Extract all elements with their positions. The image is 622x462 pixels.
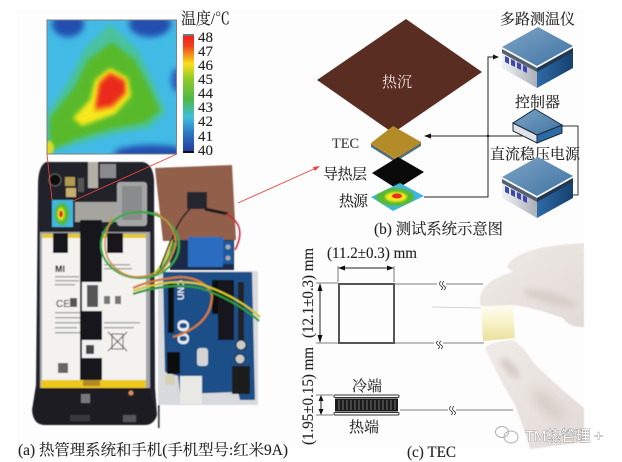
heat map colour scale: 44 <box>198 86 214 102</box>
width arrow <box>338 266 394 270</box>
Arduino board: oo <box>171 319 194 345</box>
flex cable <box>80 220 102 380</box>
TEC dimension drawing: (12.1±0.3) mm <box>300 247 317 338</box>
watermark <box>496 426 603 445</box>
schematic labels: TEC <box>332 136 359 152</box>
heat map colour scale: 40 <box>198 143 213 159</box>
icon: multi-channel thermometer <box>502 27 573 88</box>
schematic labels: 热源 <box>339 192 369 210</box>
Arduino board <box>158 271 258 428</box>
phone body: CE <box>56 299 70 310</box>
schematic labels: 导热层 <box>323 165 367 183</box>
schematic labels: 控制器 <box>515 94 560 111</box>
caption c: (c) TEC <box>407 444 456 461</box>
phone body <box>32 162 157 425</box>
coloured wires <box>101 212 260 337</box>
TEC dimension drawing: 热端 <box>349 418 379 436</box>
TEC dimension drawing <box>300 245 513 445</box>
heat map colour scale: 45 <box>198 72 213 88</box>
relay board <box>170 237 234 270</box>
mini heat map on phone <box>52 200 73 227</box>
colour scale title: 温度/℃ <box>181 10 230 28</box>
schematic labels: 直流稳压电源 <box>490 145 581 163</box>
gloved hand holding TEC <box>432 243 584 449</box>
schematic labels: 多路测温仪 <box>500 11 575 28</box>
TEC dimension drawing: (1.95±0.15) mm <box>300 346 317 445</box>
heat map colour scale: 48 <box>198 30 213 46</box>
connector: heat source to multi-channel thermometer <box>424 54 499 197</box>
TEC dimension drawing: (11.2±0.3) mm <box>327 245 418 262</box>
schematic: TEC module <box>371 126 421 162</box>
red arrow to schematic <box>238 166 320 203</box>
caption b: (b) 测试系统示意图 <box>374 220 503 238</box>
schematic: heat sink <box>317 19 482 133</box>
heat map colour scale: 46 <box>198 58 214 74</box>
red zoom lines <box>47 154 177 201</box>
heat map colour scale: 42 <box>198 114 213 130</box>
thickness arrow <box>318 395 324 415</box>
heat map colour scale: 41 <box>198 129 213 145</box>
top view square <box>339 284 394 343</box>
speaker housing <box>33 389 156 425</box>
TEC side view <box>334 395 399 415</box>
schematic: heat source <box>371 183 424 211</box>
phone and control hardware photo <box>32 162 260 428</box>
heat map <box>46 20 177 154</box>
schematic: heat sink: 热沉 <box>382 73 412 91</box>
battery <box>42 234 146 387</box>
connector: controller to TEC <box>424 134 523 138</box>
connector: controller to power supply <box>562 126 578 195</box>
schematic labels <box>323 11 581 210</box>
watermark: TM热管理 + <box>525 428 603 445</box>
icon: controller <box>513 109 562 143</box>
phone body: MI <box>55 264 65 274</box>
TEC dimension drawing: 冷端 <box>352 378 382 395</box>
copper heat sink plate <box>155 165 240 250</box>
heat map colour scale: 47 <box>198 44 214 60</box>
icon: DC power supply <box>502 157 573 218</box>
heat map colour scale <box>183 30 214 159</box>
icon: chat bubbles <box>496 426 518 443</box>
caption a: (a) 热管理系统和手机(手机型号:红米9A) <box>18 441 288 459</box>
Arduino board: UNO <box>176 280 186 300</box>
height arrow <box>318 283 322 343</box>
heat map colour scale: 43 <box>198 100 213 116</box>
schematic: thermal interface layer <box>372 157 424 189</box>
